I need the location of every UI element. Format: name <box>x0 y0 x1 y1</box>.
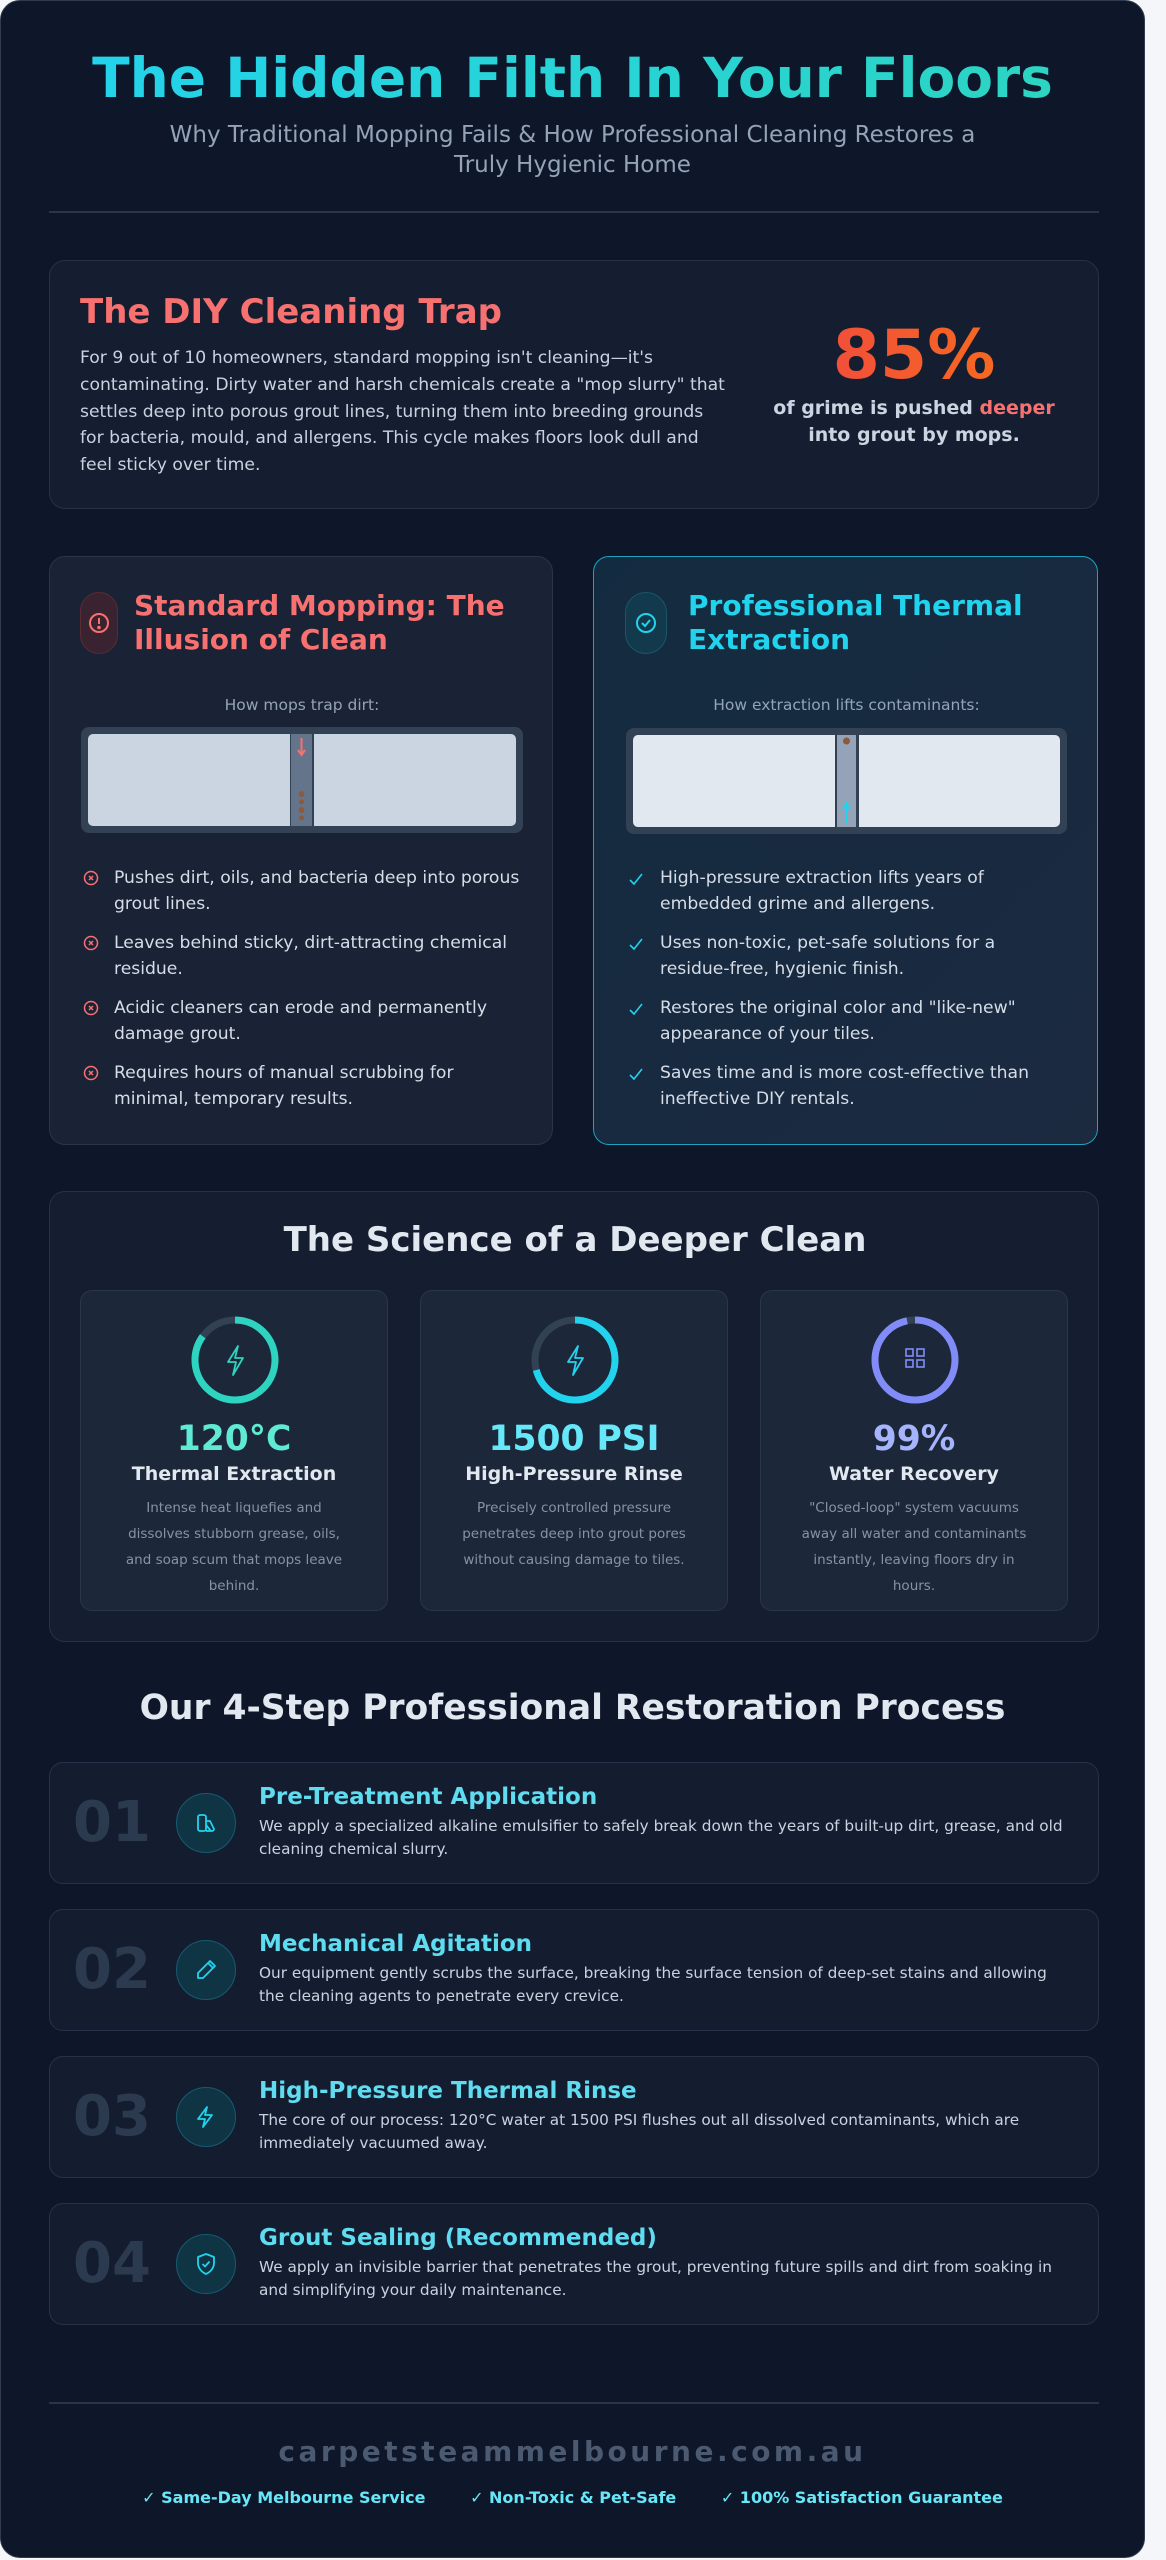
step 02: the cleaning agents to penetrate every crevice. <box>259 1987 624 2005</box>
stat card: 99%: Water Recovery <box>829 1463 999 1485</box>
diagram: extraction grout <box>626 728 1067 834</box>
list: mopping problems: Requires hours of manual scrubbing for <box>114 1063 454 1083</box>
heading: professional: Professional Thermal <box>688 589 1023 622</box>
list: benefits <box>630 868 1029 1109</box>
step 02: Mechanical Agitation <box>259 1931 532 1957</box>
stat: 85%: 85% <box>833 316 995 395</box>
panel: DIY cleaning trap <box>49 260 1099 509</box>
stat card: 1500 PSI: Precisely controlled pressure <box>477 1500 671 1516</box>
text block: DIY paragraph: contaminating. Dirty water and harsh chemicals create a "mop slurry" that <box>80 375 725 395</box>
step 04: We apply an invisible barrier that penetrates the grout, preventing future spills and dirt from soaking in <box>259 2258 1052 2276</box>
ring: recovery <box>872 1316 958 1404</box>
list: benefits: Uses non-toxic, pet-safe solutions for a <box>660 933 995 953</box>
list: mopping problems: Leaves behind sticky, dirt-attracting chemical <box>114 933 507 953</box>
step 03: The core of our process: 120°C water at 1500 PSI flushes out all dissolved contaminants, which are <box>259 2111 1019 2129</box>
list: benefits: embedded grime and allergens. <box>660 894 935 914</box>
title: The Hidden Filth In Your Floors <box>92 46 1053 110</box>
stat card: 120C: and soap scum that mops leave <box>126 1552 342 1568</box>
footer: badges: ✓ Same-Day Melbourne Service ✓ Non-Toxic & Pet-Safe ✓ 100% Satisfaction Guarantee <box>142 2488 1003 2507</box>
stat card: 1500 PSI: 1500 PSI <box>488 1419 660 1459</box>
icon: bolt <box>176 2087 236 2147</box>
step 02: 02 <box>73 1937 151 2002</box>
stat: 85%: into grout by mops. <box>808 424 1020 446</box>
text block: DIY paragraph <box>80 348 725 475</box>
heading: DIY trap: The DIY Cleaning Trap <box>80 292 502 332</box>
step 03: High-Pressure Thermal Rinse <box>259 2078 637 2104</box>
list: mopping problems: Acidic cleaners can erode and permanently <box>114 998 487 1018</box>
list: mopping problems <box>84 868 519 1109</box>
heading: professional: Extraction <box>688 623 850 656</box>
icon: brush <box>176 1940 236 2000</box>
heading: professional <box>688 589 1023 656</box>
step 04: and simplifying your daily maintenance. <box>259 2281 566 2299</box>
heading: standard mopping <box>134 589 505 656</box>
caption: How extraction lifts contaminants: <box>713 696 980 714</box>
list: benefits: residue-free, hygienic finish. <box>660 959 904 979</box>
list: mopping problems: Pushes dirt, oils, and bacteria deep into porous <box>114 868 519 888</box>
list: benefits: Restores the original color and "like-new" <box>660 998 1016 1018</box>
panel: science <box>49 1191 1099 1642</box>
stat card: 99% <box>760 1290 1068 1611</box>
stat card: 120C: 120°C <box>177 1419 291 1459</box>
caption: How mops trap dirt: <box>225 696 379 714</box>
icon: shield <box>176 2234 236 2294</box>
step 04 <box>49 2203 1099 2325</box>
subtitle: Truly Hygienic Home <box>454 152 691 178</box>
list: mopping problems: minimal, temporary results. <box>114 1089 353 1109</box>
step 02 <box>49 1909 1099 2031</box>
stat card: 1500 PSI: penetrates deep into grout pores <box>462 1526 686 1542</box>
step 01: We apply a specialized alkaline emulsifier to safely break down the years of built-up dirt, grease, and old <box>259 1817 1063 1835</box>
step 01: Pre-Treatment Application <box>259 1784 597 1810</box>
stat card: 120C <box>80 1290 388 1611</box>
stat card: 99%: hours. <box>893 1578 935 1594</box>
stat card: 1500 PSI: without causing damage to tiles. <box>463 1552 685 1568</box>
diagram: mop grout <box>81 727 523 833</box>
list: benefits: ineffective DIY rentals. <box>660 1089 855 1109</box>
list: mopping problems: grout lines. <box>114 894 211 914</box>
step 01: cleaning chemical slurry. <box>259 1840 448 1858</box>
panel: standard mopping <box>49 556 553 1145</box>
text block: DIY paragraph: settles deep into porous grout lines, turning them into breeding grounds <box>80 402 703 422</box>
step 03: 03 <box>73 2084 151 2149</box>
subtitle <box>170 122 975 178</box>
heading: standard mopping: Standard Mopping: The <box>134 589 505 622</box>
step 03 <box>49 2056 1099 2178</box>
ring: pressure <box>532 1316 618 1404</box>
stat card: 99%: "Closed-loop" system vacuums <box>809 1500 1019 1516</box>
stat card: 120C: Thermal Extraction <box>132 1463 336 1485</box>
step 01 <box>49 1762 1099 1884</box>
list: benefits: High-pressure extraction lifts years of <box>660 868 984 888</box>
subtitle: Why Traditional Mopping Fails & How Professional Cleaning Restores a <box>170 122 975 148</box>
stat card: 1500 PSI: High-Pressure Rinse <box>465 1463 683 1485</box>
text block: DIY paragraph: for bacteria, mould, and allergens. This cycle makes floors look dull and <box>80 428 699 448</box>
stat: 85%: of grime is pushed deeper <box>773 397 1055 419</box>
icon: check <box>625 592 667 654</box>
stat card: 99%: instantly, leaving floors dry in <box>813 1552 1015 1568</box>
footer: domain: carpetsteammelbourne.com.au <box>278 2435 867 2468</box>
stat card: 120C: Intense heat liquefies and <box>146 1500 322 1516</box>
stat: 85% <box>773 316 1055 446</box>
stat card: 1500 PSI <box>420 1290 728 1611</box>
list: mopping problems: damage grout. <box>114 1024 241 1044</box>
step 04: 04 <box>73 2231 151 2296</box>
step 01: 01 <box>73 1790 151 1855</box>
stat card: 120C: behind. <box>209 1578 259 1594</box>
text block: DIY paragraph: For 9 out of 10 homeowners, standard mopping isn't cleaning—it's <box>80 348 653 368</box>
heading: process: Our 4-Step Professional Restoration Process <box>140 1688 1005 1728</box>
heading: science: The Science of a Deeper Clean <box>284 1220 866 1260</box>
list: mopping problems: residue. <box>114 959 183 979</box>
ring: thermal <box>192 1316 278 1404</box>
stat card: 120C: dissolves stubborn grease, oils, <box>128 1526 340 1542</box>
step 04: Grout Sealing (Recommended) <box>259 2225 657 2251</box>
icon: warning <box>80 592 118 654</box>
step 03: immediately vacuumed away. <box>259 2134 487 2152</box>
list: benefits: Saves time and is more cost-effective than <box>660 1063 1029 1083</box>
heading: standard mopping: Illusion of Clean <box>134 623 388 656</box>
list: benefits: appearance of your tiles. <box>660 1024 875 1044</box>
icon: spray bottle <box>176 1793 236 1853</box>
stat card: 99%: away all water and contaminants <box>802 1526 1026 1542</box>
text block: DIY paragraph: feel sticky over time. <box>80 455 260 475</box>
stat card: 99%: 99% <box>873 1419 955 1459</box>
panel: professional extraction <box>593 556 1098 1145</box>
step 02: Our equipment gently scrubs the surface, breaking the surface tension of deep-set stains and allowing <box>259 1964 1047 1982</box>
